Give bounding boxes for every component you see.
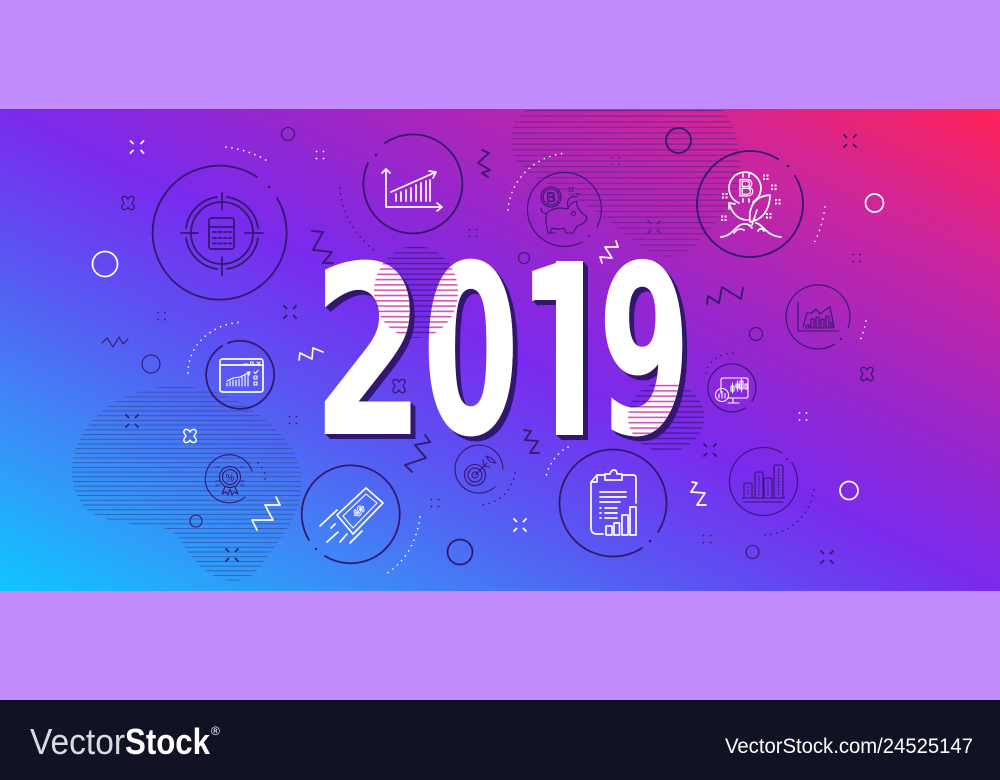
hatched circle behind 9 [628, 382, 704, 452]
footer id: VectorStock.com/24525147 [725, 735, 973, 758]
zigzags [102, 150, 743, 530]
small cross shapes [122, 196, 873, 443]
icon: bitcoin plant [697, 151, 803, 257]
dotted arcs [188, 147, 866, 574]
hatched blob: bottom left [72, 386, 302, 581]
corner tick marks [126, 135, 856, 563]
icon: money in motion [302, 465, 400, 563]
2019 heading: 2 [312, 216, 424, 490]
icon: target with arrow [455, 445, 503, 493]
pink hatch over digits [374, 263, 679, 434]
icon: bitcoin plant: B [738, 175, 754, 202]
icon: monitor with candlesticks [708, 364, 756, 412]
icon: bar chart [729, 448, 797, 516]
four-dot marks [158, 152, 860, 542]
footer logo: Vector [30, 721, 125, 762]
2019 heading: 9 [598, 216, 691, 490]
footer logo [30, 721, 220, 762]
footer logo: Stock [125, 721, 211, 762]
small rings [92, 128, 884, 564]
icon: money in motion: $ [350, 502, 368, 521]
icon: growth chart [363, 134, 462, 233]
icon: percent badge: % [226, 473, 235, 484]
icon: clipboard report [560, 450, 667, 557]
2019 heading: 1 [516, 215, 616, 490]
icon: browser chart [206, 341, 274, 409]
2019 heading [324, 258, 688, 442]
icon: bitcoin piggy bank [527, 172, 601, 246]
footer bar [0, 700, 1000, 780]
icon: calculator in target [153, 166, 287, 300]
hatched blob: top [511, 109, 740, 256]
hatched circle behind 2 and 0 [374, 246, 458, 338]
2019 heading: 0 [422, 214, 519, 489]
icon: bitcoin piggy bank: B [546, 189, 556, 205]
footer logo: ® [211, 724, 220, 738]
icon: percent badge [205, 455, 252, 503]
icon: area chart [786, 285, 850, 349]
gradient banner [0, 109, 1000, 591]
